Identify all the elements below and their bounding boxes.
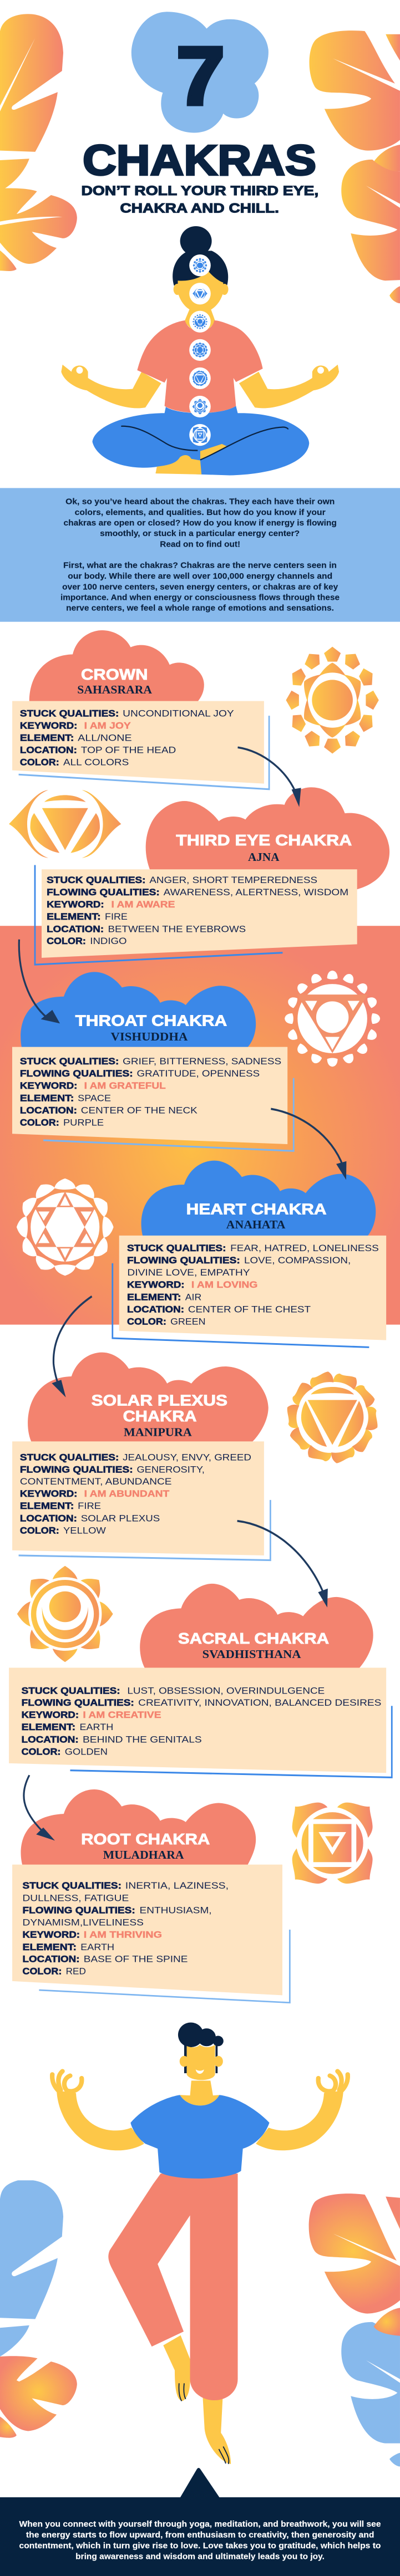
- crown card: UNCONDITIONAL JOY: [123, 708, 234, 718]
- subtitle: DON’T ROLL YOUR THIRD EYE,: [81, 183, 318, 198]
- trousers and feet: [108, 2174, 238, 2464]
- panel: intro: over 100 nerve centers, seven energy centers, or chakras are of key: [62, 582, 338, 592]
- throat card: SPACE: [78, 1093, 111, 1103]
- sacral card: COLOR:: [22, 1746, 60, 1757]
- root card: RED: [66, 1966, 86, 1977]
- panel: intro: Ok, so you’ve heard about the chakras. They each have their own: [65, 497, 335, 506]
- third eye card outline: [35, 865, 282, 965]
- sacral card: STUCK QUALITIES:: [22, 1685, 120, 1696]
- sacral card: LOCATION:: [22, 1735, 79, 1745]
- solar plexus heading: CHAKRA: [123, 1407, 196, 1425]
- solar plexus card: ELEMENT:: [20, 1501, 74, 1511]
- icon: throat chakra: [285, 971, 380, 1067]
- arrow: heart to solar plexus: [52, 1297, 92, 1397]
- sacral card: ELEMENT:: [22, 1722, 75, 1732]
- solar plexus card outline: [19, 1500, 270, 1560]
- heart card: ELEMENT:: [127, 1292, 181, 1303]
- solar plexus cloud: [28, 1353, 269, 1443]
- panel: intro: Read on to find out!: [160, 539, 240, 549]
- throat card: PURPLE: [63, 1117, 104, 1128]
- panel: crown chakra: [12, 630, 379, 789]
- throat heading: [75, 1012, 227, 1043]
- arrow: throat to heart: [271, 1109, 346, 1180]
- sacral card: KEYWORD:: [22, 1710, 79, 1720]
- leaves: top left: [0, 14, 77, 271]
- panel: intro: First, what are the chakras? Chakras are the nerve centers seen in: [63, 561, 337, 570]
- panel: closing text: [0, 2468, 400, 2576]
- panel: intro: importance. And when energy or consciousness flows through these: [60, 593, 340, 602]
- heart card: CENTER OF THE CHEST: [188, 1304, 311, 1315]
- sacral card: CREATIVITY, INNOVATION, BALANCED DESIRES: [138, 1697, 381, 1708]
- third eye heading: THIRD EYE CHAKRA: [176, 832, 352, 849]
- sacral cloud: [140, 1584, 373, 1669]
- crown card outline: [19, 716, 269, 789]
- solar plexus card: FLOWING QUALITIES:: [20, 1464, 133, 1475]
- solar plexus card: CONTENTMENT, ABUNDANCE: [20, 1476, 172, 1487]
- shirt: [130, 2095, 270, 2179]
- sacral card: FLOWING QUALITIES:: [22, 1697, 134, 1708]
- sacral heading: SVADHISTHANA: [202, 1647, 301, 1661]
- leaves: bottom right: [309, 2194, 400, 2467]
- third eye card: AWARENESS, ALERTNESS, WISDOM: [164, 887, 348, 897]
- solar plexus card: JEALOUSY, ENVY, GREED: [123, 1452, 251, 1462]
- heart card: LOCATION:: [127, 1304, 184, 1315]
- icon: sacral chakra: [17, 1566, 113, 1662]
- third eye card: LOCATION:: [47, 924, 104, 934]
- root card: I AM THRIVING: [84, 1929, 162, 1940]
- third eye heading: [176, 832, 352, 864]
- third eye card: FIRE: [105, 911, 128, 922]
- throat card: I AM GRATEFUL: [84, 1080, 166, 1091]
- sacral card: I AM CREATIVE: [83, 1710, 161, 1720]
- root heading: MULADHARA: [103, 1848, 184, 1861]
- panel: intro: smoothly, or stuck in a particular energy center?: [100, 529, 300, 538]
- root card: INERTIA, LAZINESS,: [125, 1880, 229, 1891]
- heart card: FEAR, HATRED, LONELINESS: [230, 1243, 379, 1253]
- third eye card: FLOWING QUALITIES:: [47, 887, 160, 897]
- solar plexus card: COLOR:: [20, 1526, 59, 1536]
- heart heading: HEART CHAKRA: [186, 1201, 327, 1218]
- panel: closing text: When you connect with yourself through yoga, meditation, and breathwork, you will see: [19, 2519, 381, 2529]
- arrow: third eye to throat: [19, 940, 60, 1023]
- crown heading: SAHASRARA: [77, 683, 153, 696]
- arrow: sacral to root: [24, 1775, 55, 1840]
- root card: ENTHUSIASM,: [140, 1905, 212, 1915]
- third eye card: [42, 869, 357, 958]
- leaves: bottom left: [0, 2180, 77, 2438]
- root card: STUCK QUALITIES:: [22, 1880, 121, 1891]
- throat card: CENTER OF THE NECK: [81, 1105, 198, 1115]
- heart card: FLOWING QUALITIES:: [127, 1255, 240, 1266]
- root heading: [81, 1830, 210, 1861]
- panel: intro: colors, elements, and qualities. But how do you know if your: [75, 508, 326, 517]
- crown card: TOP OF THE HEAD: [81, 744, 176, 755]
- solar plexus card: YELLOW: [63, 1526, 106, 1536]
- title: 7: 7: [176, 30, 225, 122]
- sacral card: EARTH: [80, 1722, 113, 1732]
- solar plexus card: KEYWORD:: [20, 1488, 77, 1499]
- panel: third eye chakra: [9, 787, 389, 965]
- heart card: I AM LOVING: [191, 1279, 257, 1290]
- panel: intro: nerve centers, we feel a whole range of emotions and sensations.: [66, 604, 334, 613]
- crown card: KEYWORD:: [20, 721, 77, 731]
- third eye card: ELEMENT:: [47, 911, 101, 922]
- subtitle: CHAKRA AND CHILL.: [120, 201, 279, 216]
- heart card: COLOR:: [127, 1316, 166, 1327]
- subtitle: [81, 183, 318, 216]
- root heading: ROOT CHAKRA: [81, 1830, 210, 1848]
- panel: root chakra: [12, 1789, 373, 2003]
- root card: [12, 1865, 282, 1995]
- throat heading: THROAT CHAKRA: [75, 1012, 227, 1029]
- head: [178, 2022, 224, 2105]
- crown card: ELEMENT:: [20, 732, 74, 743]
- sacral card: LUST, OBSESSION, OVERINDULGENCE: [127, 1685, 325, 1696]
- icon: heart chakra: [17, 1179, 114, 1276]
- root card outline: [39, 1930, 290, 2003]
- arrow: crown to third eye: [238, 747, 301, 807]
- solar plexus card: SOLAR PLEXUS: [81, 1513, 160, 1524]
- root card: FLOWING QUALITIES:: [22, 1905, 135, 1915]
- arms: [52, 2071, 348, 2150]
- crown card: LOCATION:: [20, 744, 77, 755]
- panel: closing text: contentment, which in turn give rise to love. Love takes you to gratitude, which helps to: [19, 2541, 381, 2551]
- solar plexus heading: SOLAR PLEXUS: [92, 1391, 227, 1409]
- panel: solar plexus chakra: [12, 1353, 377, 1560]
- icon: root chakra: [292, 1803, 373, 1884]
- crown card: ALL COLORS: [63, 757, 129, 767]
- third eye card: KEYWORD:: [47, 899, 104, 910]
- third eye heading: AJNA: [248, 850, 280, 864]
- panel: throat chakra: [12, 971, 380, 1151]
- chakra points along the spine: [189, 254, 211, 446]
- sacral heading: [178, 1630, 329, 1661]
- third eye card: STUCK QUALITIES:: [47, 875, 145, 885]
- root card: EARTH: [80, 1942, 114, 1952]
- throat card: KEYWORD:: [20, 1080, 77, 1091]
- sacral card: BEHIND THE GENITALS: [83, 1735, 202, 1745]
- throat card: [12, 1047, 287, 1144]
- heart card: GREEN: [170, 1316, 206, 1327]
- root card: KEYWORD:: [22, 1929, 80, 1940]
- figure: seated meditator: [61, 226, 339, 476]
- sacral card: [9, 1667, 386, 1773]
- crown card: STUCK QUALITIES:: [20, 708, 119, 718]
- sacral heading: SACRAL CHAKRA: [178, 1630, 329, 1647]
- leaves: top right: [310, 30, 400, 303]
- heart card: AIR: [185, 1292, 201, 1303]
- figure: standing tree pose: [52, 2022, 348, 2464]
- solar plexus card: GENEROSITY,: [136, 1464, 205, 1475]
- solar plexus card: [12, 1441, 264, 1555]
- panel: intro: our body. While there are well over 100,000 energy channels and: [68, 572, 332, 581]
- heart heading: [186, 1201, 327, 1231]
- solar plexus card: I AM ABUNDANT: [84, 1488, 170, 1499]
- throat heading: VISHUDDHA: [111, 1030, 188, 1043]
- root card: BASE OF THE SPINE: [84, 1954, 188, 1965]
- throat card: ELEMENT:: [20, 1093, 74, 1103]
- panel: intro: [0, 488, 400, 622]
- panel: closing text: bring awareness and wisdom and ultimately leads you to joy.: [75, 2552, 325, 2561]
- crown heading: [77, 666, 153, 696]
- panel: closing text: the energy starts to flow upward, from enthusiasm to creativity, then generosity and: [26, 2531, 374, 2540]
- throat card: STUCK QUALITIES:: [20, 1056, 119, 1067]
- third eye card: ANGER, SHORT TEMPEREDNESS: [149, 875, 317, 885]
- root card: COLOR:: [22, 1966, 62, 1977]
- icon: crown chakra: [286, 647, 379, 753]
- panel: intro: chakras are open or closed? How do you know if energy is flowing: [63, 518, 337, 528]
- crown card: I AM JOY: [84, 721, 131, 731]
- throat card outline: [43, 1078, 293, 1151]
- crown heading: CROWN: [81, 666, 148, 683]
- third eye card: BETWEEN THE EYEBROWS: [108, 924, 246, 934]
- third eye card: INDIGO: [90, 936, 126, 946]
- throat card: GRATITUDE, OPENNESS: [136, 1068, 260, 1079]
- heart card: DIVINE LOVE, EMPATHY: [127, 1267, 250, 1278]
- solar plexus heading: MANIPURA: [124, 1426, 193, 1439]
- heart card: LOVE, COMPASSION,: [244, 1255, 351, 1266]
- heart card: [119, 1236, 386, 1340]
- crown card: COLOR:: [20, 757, 59, 767]
- solar plexus heading: [92, 1391, 227, 1439]
- root card: DYNAMISM,LIVELINESS: [22, 1917, 144, 1928]
- crown card: [12, 701, 264, 784]
- arrow: solar plexus to sacral: [237, 1521, 328, 1608]
- crown cloud: [29, 630, 204, 703]
- third eye cloud: [146, 787, 389, 890]
- panel: gradient background for throat and heart: [0, 926, 400, 1325]
- throat card: COLOR:: [20, 1117, 59, 1128]
- throat cloud: [21, 972, 256, 1048]
- title: chakras: CHAKRAS: [83, 136, 316, 184]
- third eye card: I AM AWARE: [111, 899, 175, 910]
- root card: DULLNESS, FATIGUE: [22, 1893, 129, 1904]
- heart cloud: [141, 1161, 376, 1236]
- heart card: STUCK QUALITIES:: [127, 1243, 226, 1253]
- root cloud: [21, 1789, 256, 1865]
- solar plexus card: LOCATION:: [20, 1513, 77, 1524]
- crown card: ALL/NONE: [78, 732, 132, 743]
- heart card: KEYWORD:: [127, 1279, 184, 1290]
- throat card: GRIEF, BITTERNESS, SADNESS: [123, 1056, 281, 1067]
- throat card: LOCATION:: [20, 1105, 77, 1115]
- sacral card: GOLDEN: [65, 1746, 108, 1757]
- third eye card: COLOR:: [47, 936, 86, 946]
- icon: third eye chakra: [9, 790, 121, 858]
- icon: solar plexus chakra: [287, 1371, 377, 1464]
- sacral card outline: [70, 1706, 392, 1777]
- cloud: title background: [131, 12, 269, 133]
- panel: heart chakra: [17, 1161, 386, 1347]
- root card: ELEMENT:: [22, 1942, 77, 1952]
- solar plexus card: STUCK QUALITIES:: [20, 1452, 119, 1462]
- heart heading: ANAHATA: [226, 1218, 286, 1231]
- throat card: FLOWING QUALITIES:: [20, 1068, 133, 1079]
- root card: LOCATION:: [22, 1954, 80, 1965]
- panel: sacral chakra: [9, 1566, 392, 1777]
- heart card outline: [113, 1263, 369, 1347]
- solar plexus card: FIRE: [78, 1501, 101, 1511]
